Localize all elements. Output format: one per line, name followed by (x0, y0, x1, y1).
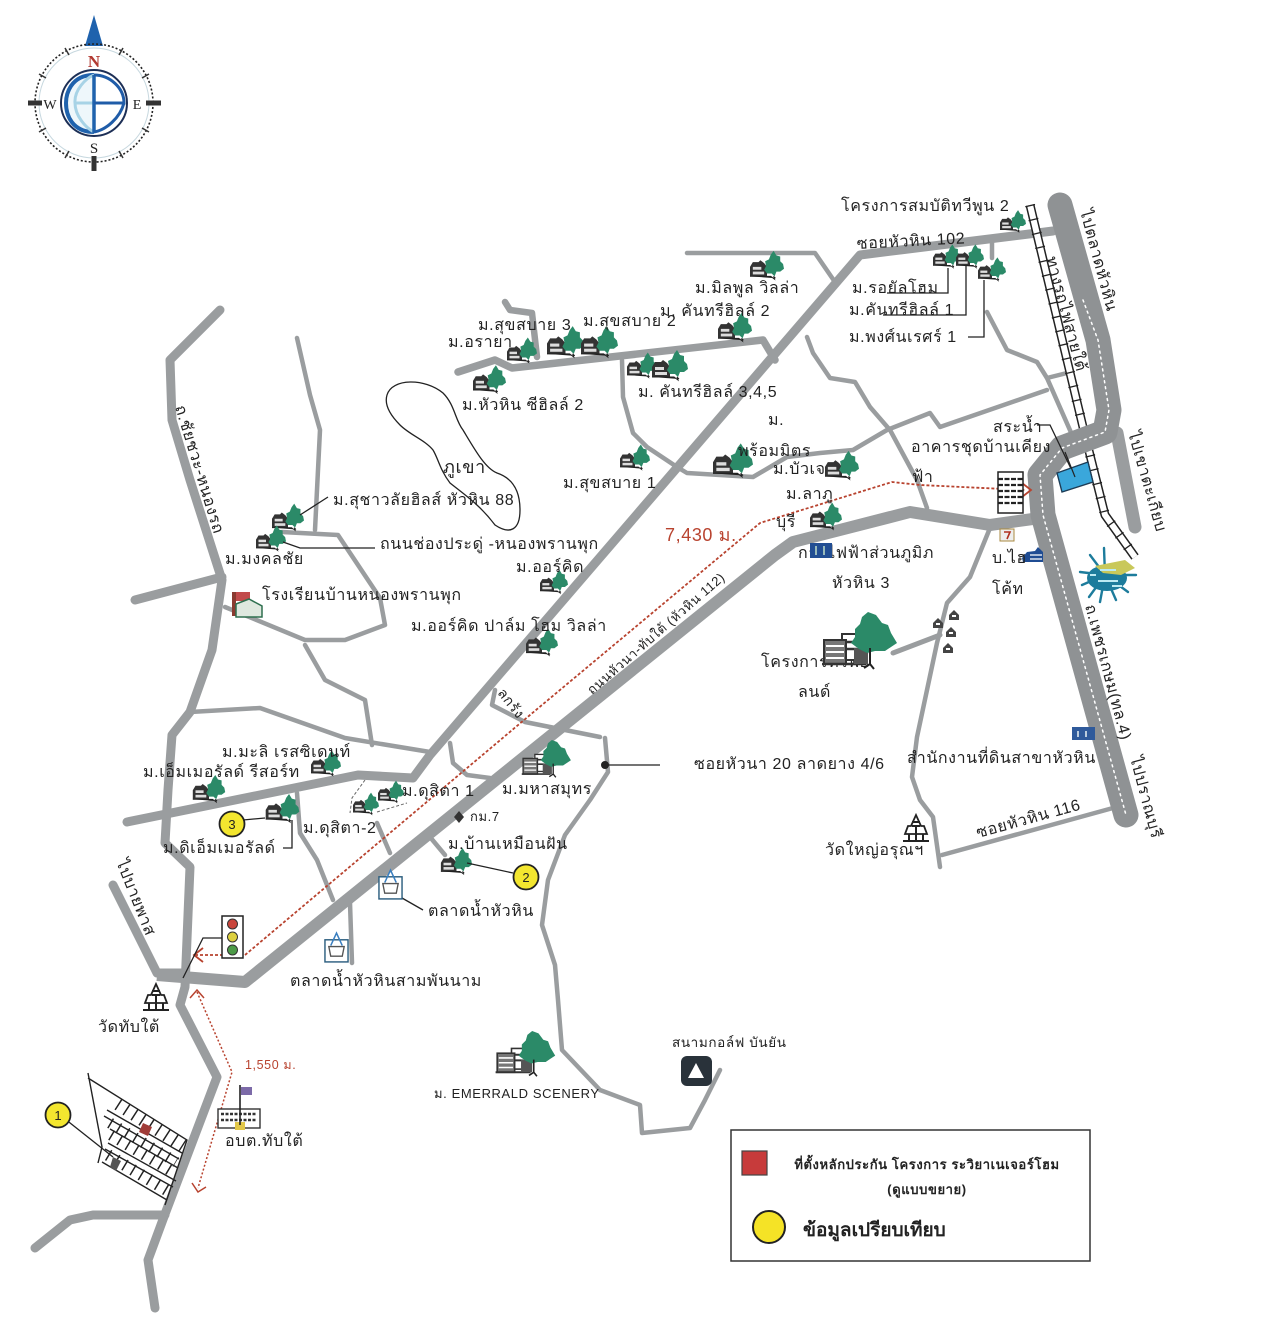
route distance 7,430: 7,430 ม. (665, 525, 737, 545)
number marker 1 (46, 1102, 70, 1128)
place labels: ม.มหาสมุทร (502, 781, 592, 799)
place labels: ตลาดน้ำหัวหิน (428, 899, 534, 920)
place labels: ม.มงคลชัย (225, 551, 304, 568)
mountain outline (386, 382, 520, 530)
junction marker (601, 761, 609, 769)
rotated road labels: ไปตลาดหัวหิน (1076, 205, 1122, 313)
place labels: ฟ้า (912, 468, 934, 486)
place labels: โครงการสมบัติทวีพูน 2 (841, 196, 1009, 216)
place labels: ม.ออร์คิด (516, 557, 584, 576)
place labels: ม.เอ็มเมอรัลด์ รีสอร์ท (143, 761, 300, 781)
project plot red marker (139, 1123, 152, 1136)
place labels: ม. EMERRALD SCENERY (434, 1086, 600, 1101)
place labels: ม.พงศ์นเรศร์ 1 (849, 327, 957, 346)
place labels: ม.มิลพูล วิลล่า (695, 280, 799, 298)
electricity office icon (810, 543, 832, 558)
traffic light (222, 916, 243, 958)
place labels: บ.ไฮ (992, 548, 1027, 567)
red route 7,430 m (194, 482, 1031, 962)
rotated road labels: ลกรัง (495, 685, 528, 721)
place labels: ตลาดน้ำหัวหินสามพันนาม (290, 969, 482, 990)
place labels: ม.มะลิ เรสซิเดนท์ (222, 742, 351, 761)
place labels: โรงเรียนบ้านหนองพรานพุก (262, 585, 462, 605)
place labels: พร้อมมิตร (738, 442, 811, 460)
place labels: ม.สุชาวลัยฮิลส์ หัวหิน 88 (333, 490, 514, 510)
place labels: ม.สุขสบาย 1 (563, 475, 656, 493)
place labels: ภูเขา (443, 457, 486, 478)
golf course icon (681, 1056, 712, 1086)
route distance 1,550: 1,550 ม. (245, 1058, 296, 1072)
project plot grey marker (110, 1157, 121, 1171)
rotated road labels (112, 205, 1171, 938)
rotated road labels: ไปบายพาส (112, 855, 160, 938)
school icon (232, 592, 262, 617)
number marker 1: 1 (54, 1108, 62, 1123)
place labels: ซอยหัวหิน 102 (856, 230, 966, 253)
rotated road labels: ถ.เพชรเกษม(ทล.4) (1081, 603, 1134, 742)
place labels: ม.ออร์คิด ปาล์ม โฮม วิลล่า (411, 616, 607, 635)
secondary roads (35, 231, 1135, 1308)
legend: plot subtext: (ดูแบบขยาย) (887, 1182, 967, 1198)
place labels: กม.7 (470, 809, 500, 824)
place labels: ม.สุขสบาย 3 (478, 317, 571, 335)
temple icons (143, 815, 929, 1010)
place labels: ม.รอยัลโฮม (852, 278, 939, 297)
place labels: ม. คันทรีฮิลล์ 3,4,5 (638, 382, 777, 401)
place labels: โค้ท (992, 579, 1024, 598)
housing icons (193, 210, 1026, 1076)
splash logo (1080, 548, 1136, 602)
highway 112 (157, 512, 1040, 982)
dashed estate lane (350, 780, 407, 813)
highway 4 (1040, 205, 1126, 815)
thin local roads (190, 240, 1113, 1133)
place labels: ม.คันทรีฮิลล์ 1 (849, 300, 954, 319)
place labels: ม.ลาภู (786, 486, 833, 504)
place labels: สำนักงานที่ดินสาขาหัวหิน (907, 746, 1096, 767)
project name under icon: โครงการทรัพย์ (761, 652, 870, 671)
place labels: ม.หัวหิน ซีฮิลล์ 2 (462, 395, 584, 414)
place labels: ม.ดุสิตา-2 (303, 820, 377, 838)
market icons (325, 870, 402, 962)
rotated road labels: ถนนหัวนา-ทับใต้ (หัวหิน 112) (584, 570, 728, 697)
place labels: ถนนช่องประดู่ -หนองพรานพุก (380, 536, 599, 554)
place labels: ซอยหัวนา 20 ลาดยาง 4/6 (694, 756, 885, 773)
apartment building (998, 472, 1023, 513)
legend: red plot swatch (742, 1151, 767, 1175)
place labels: ลนด์ (798, 682, 831, 701)
place labels: ม.บัวเจ (773, 461, 826, 478)
place labels: หัวหิน 3 (832, 575, 890, 592)
compass north label: N (88, 52, 101, 71)
gas station icon (1022, 547, 1043, 562)
small houses (933, 610, 959, 653)
place labels: วัดทับใต้ (98, 1017, 160, 1036)
place labels: ม.ดิเอ็มเมอรัลด์ (163, 837, 276, 857)
place labels: ซอยหัวหิน 116 (975, 797, 1083, 842)
compass east label: E (133, 98, 141, 113)
number marker 2: 2 (522, 870, 530, 885)
legend: plot text: ที่ตั้งหลักประกัน โครงการ ระวิยาเนเจอร์โฮม (794, 1154, 1060, 1172)
leader lines (60, 265, 1075, 1157)
swimming pool (1057, 462, 1093, 492)
km7 marker (454, 811, 464, 823)
railway (1030, 205, 1135, 557)
compass west label: W (43, 98, 57, 113)
number marker 3: 3 (228, 817, 236, 832)
project plot (88, 1073, 187, 1205)
red route 1,550 m (190, 990, 232, 1192)
rotated road labels: ทางรถไฟสายใต้ (1042, 254, 1091, 374)
legend: yellow circle (753, 1211, 785, 1243)
pool leader tip (1065, 452, 1075, 477)
compass rose (28, 15, 161, 171)
land office icon (1072, 727, 1095, 740)
place labels: ม.บ้านเหมือนฝัน (448, 835, 568, 853)
place labels: ม.ดุสิตา 1 (402, 783, 475, 801)
place labels: สระน้ำ (993, 415, 1042, 436)
legend (731, 1130, 1090, 1261)
legend: comparison text: ข้อมูลเปรียบเทียบ (803, 1219, 946, 1242)
electricity office label beneath icon: การไฟฟ้าส่วนภูมิภ (798, 543, 934, 563)
place labels: อบต.ทับใต้ (225, 1131, 303, 1150)
place labels: บุรี (776, 513, 796, 532)
place labels: วัดใหญ่อรุณฯ (825, 840, 924, 860)
rotated road labels: ถ.ชัยชวะ-หนองรถ (171, 403, 227, 536)
rotated road labels: ไปปราณบุรี (1125, 752, 1166, 841)
convenience store icon (1000, 529, 1014, 541)
compass south label: S (90, 141, 98, 157)
rotated road labels: ไปเขาตะเกียบ (1124, 427, 1171, 534)
number marker 3 (220, 812, 244, 836)
place labels: ม.อรายา (448, 334, 513, 351)
place labels (98, 196, 1096, 1150)
place labels: อาคารชุดบ้านเคียง (911, 438, 1051, 457)
number marker 2 (514, 864, 538, 890)
district office icon (218, 1085, 260, 1130)
place labels: สนามกอล์ฟ บันยัน (672, 1034, 787, 1050)
place labels: ม.สุขสบาย 2 (583, 313, 676, 331)
place labels: ม. (768, 412, 784, 429)
place labels: ม. คันทรีฮิลล์ 2 (660, 301, 770, 320)
